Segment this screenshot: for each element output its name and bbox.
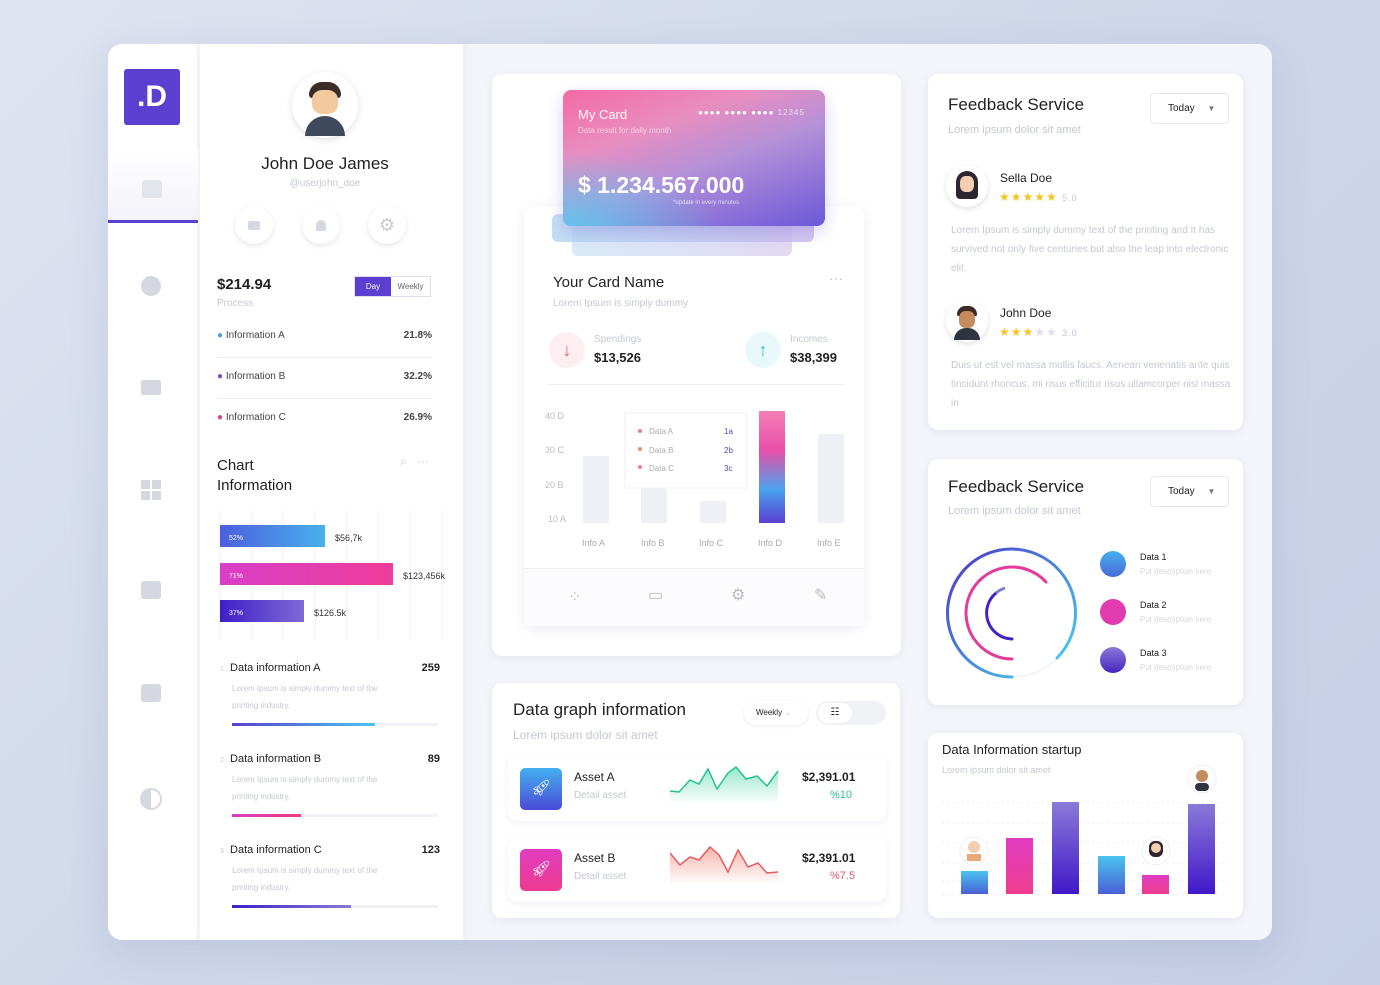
bottom icons: ▭ bbox=[648, 587, 663, 604]
column chart: 40 D bbox=[545, 411, 565, 421]
bar chart bbox=[220, 510, 446, 641]
inner card bbox=[524, 206, 864, 626]
panel: feedback service 1: John Doe bbox=[1000, 306, 1051, 320]
panel: feedback service 1: Today ▼ bbox=[1168, 103, 1215, 114]
column chart: 2b bbox=[724, 446, 733, 455]
asset B: $2,391.01 bbox=[802, 851, 855, 865]
data info list bbox=[220, 662, 440, 908]
panel: data information startup bbox=[928, 733, 1243, 918]
data info list: Lorem Ipsum is simply dummy text of the bbox=[232, 684, 377, 693]
profile icons bbox=[234, 215, 407, 247]
data info list: Lorem Ipsum is simply dummy text of the bbox=[232, 866, 377, 875]
column chart: 3c bbox=[724, 464, 732, 473]
inner card: $13,526 bbox=[594, 350, 641, 365]
panel: feedback service 2 bbox=[928, 459, 1243, 705]
panel: my card: ●●●● ●●●● ●●●● 12345 bbox=[698, 108, 805, 117]
bar chart: $126.5k bbox=[314, 608, 347, 618]
toggle day/weekly: Day bbox=[366, 282, 380, 291]
panel: my card: Data result for daily month bbox=[578, 126, 671, 135]
bottom icons: ⁘ bbox=[568, 589, 581, 606]
nav icons bbox=[140, 276, 162, 810]
data info list: 2 Data information B bbox=[220, 753, 321, 765]
data info list: 89 bbox=[428, 753, 440, 765]
panel: feedback service 1: Duis ut est vel massa mollis faucs. Aenean venenatis ante quis tincidunt rhoncus, mi risus efficitur risus ullamcorper nisl massa in bbox=[951, 360, 1230, 409]
column chart bbox=[545, 411, 844, 546]
bottom icons bbox=[524, 568, 864, 626]
bar chart: $56,7k bbox=[335, 533, 363, 543]
sidebar bbox=[108, 44, 198, 940]
data info list: 123 bbox=[422, 844, 440, 856]
legend bbox=[1100, 551, 1211, 673]
column chart: 30 C bbox=[545, 445, 565, 455]
info list: 26.9% bbox=[404, 412, 432, 423]
panel: feedback service 2: Feedback Service bbox=[948, 477, 1084, 496]
asset A: %10 bbox=[830, 789, 852, 801]
legend: Data 3 bbox=[1140, 648, 1167, 658]
inner card: Lorem Ipsum is simply dummy bbox=[553, 298, 688, 309]
column chart: 20 B bbox=[545, 480, 564, 490]
panel: feedback service 1: ★★★★★ 5.0 bbox=[999, 190, 1078, 204]
toggle day/weekly: Weekly bbox=[397, 282, 424, 291]
profile panel: Process bbox=[217, 298, 253, 309]
panel: feedback service 1: Sella Doe bbox=[1000, 171, 1052, 185]
data info list: 3 Data information C bbox=[220, 844, 322, 856]
asset A: Asset A bbox=[574, 770, 615, 784]
asset B: Asset B bbox=[574, 851, 615, 865]
info list: 21.8% bbox=[404, 330, 432, 341]
panel: feedback service 1: ★★★★★ 3.0 bbox=[999, 325, 1078, 339]
asset A bbox=[508, 756, 886, 821]
panel: data graph information: Data graph information bbox=[513, 700, 686, 719]
data info list: printing industry. bbox=[232, 792, 290, 801]
reviewer: Sella bbox=[946, 165, 988, 207]
bottom icons: ✎ bbox=[814, 587, 827, 604]
panel: my card: My Card bbox=[578, 107, 627, 122]
inner card: Your Card Name bbox=[553, 274, 664, 291]
incomes: ↑ bbox=[758, 340, 768, 360]
inner card: Incomes bbox=[790, 334, 828, 345]
column chart: 10 A bbox=[548, 514, 566, 524]
profile icons: ⚙ bbox=[379, 215, 395, 235]
chart heading bbox=[217, 457, 292, 494]
panel: data graph information: Lorem ipsum dolor sit amet bbox=[513, 728, 658, 742]
data info list: 259 bbox=[422, 662, 440, 674]
legend: Put description here bbox=[1140, 567, 1211, 576]
inner card: Spendings bbox=[594, 334, 641, 345]
legend: Put description here bbox=[1140, 615, 1211, 624]
data info list: printing industry. bbox=[232, 701, 290, 710]
incomes bbox=[745, 332, 781, 368]
avatar bbox=[292, 72, 358, 138]
legend: Data 1 bbox=[1140, 552, 1167, 562]
data info list: Lorem Ipsum is simply dummy text of the bbox=[232, 775, 377, 784]
panel: data graph information: Weekly ⌄ bbox=[756, 708, 791, 717]
name: John Doe James bbox=[261, 154, 389, 173]
profile panel: ⌕ ··· bbox=[400, 454, 429, 468]
toggle day/weekly bbox=[354, 276, 431, 297]
panel: feedback service 1: Lorem Ipsum is simply dummy text of the printing and It has survived not only five centuries but also the leap into electronic elit. bbox=[951, 225, 1228, 274]
panel: my card: *update in every minutes bbox=[673, 200, 739, 206]
spendings bbox=[549, 332, 585, 368]
logo bbox=[124, 69, 180, 125]
inner card: ··· bbox=[829, 270, 843, 286]
asset B: 🚀︎ bbox=[531, 861, 551, 878]
column chart: Data B bbox=[649, 446, 673, 455]
column chart: Data C bbox=[649, 464, 674, 473]
column chart: 1a bbox=[724, 427, 733, 436]
nav: home active bbox=[108, 150, 198, 223]
panel: data information startup: Data Information startup bbox=[942, 742, 1081, 757]
panel: data graph information bbox=[492, 683, 900, 918]
profile panel bbox=[200, 44, 463, 940]
asset B: %7.5 bbox=[830, 870, 855, 882]
column chart: Data A bbox=[649, 427, 674, 436]
asset B: Detail asset bbox=[574, 871, 626, 882]
inner card: $38,399 bbox=[790, 350, 837, 365]
bar chart: 37% bbox=[229, 610, 243, 617]
reviewer: John bbox=[946, 300, 988, 342]
info list: ● Information C bbox=[217, 412, 286, 423]
bar chart: 71% bbox=[229, 573, 243, 580]
spendings: ↓ bbox=[562, 340, 572, 360]
panel: my card bbox=[492, 74, 901, 656]
asset A: 🚀︎ bbox=[531, 780, 551, 797]
panel: my card: $ 1.234.567.000 bbox=[578, 172, 744, 198]
panel: feedback service 1: Feedback Service bbox=[948, 95, 1084, 114]
panel: feedback service 2: Today ▼ bbox=[1168, 486, 1215, 497]
chart heading: Chart bbox=[217, 457, 254, 474]
asset B bbox=[508, 837, 886, 902]
radial chart bbox=[946, 548, 1077, 678]
logo: .D bbox=[137, 80, 167, 113]
bar chart: $123,456k bbox=[403, 571, 446, 581]
balance: $214.94 bbox=[217, 276, 271, 293]
info list: ● Information A bbox=[217, 330, 285, 341]
panel: feedback service 2: Lorem ipsum dolor sit amet bbox=[948, 505, 1081, 517]
bottom icons: ⚙ bbox=[731, 587, 745, 604]
bar chart: 52% bbox=[229, 535, 243, 542]
panel: feedback service 1: Lorem ipsum dolor sit amet bbox=[948, 124, 1081, 136]
chart heading: Information bbox=[217, 477, 292, 494]
info list: ● Information B bbox=[217, 371, 285, 382]
data info list: printing industry. bbox=[232, 883, 290, 892]
panel: data information startup: Lorem ipsum dolor sit amet bbox=[942, 765, 1051, 775]
legend: Put description here bbox=[1140, 663, 1211, 672]
data info list: 1 Data information A bbox=[220, 662, 321, 674]
profile panel: @userjohn_doe bbox=[290, 178, 360, 189]
main frame bbox=[108, 44, 1272, 940]
asset A: Detail asset bbox=[574, 790, 626, 801]
panel: feedback service 1 bbox=[928, 74, 1243, 430]
panel: data graph information: ☷ bbox=[831, 707, 839, 718]
info list bbox=[217, 330, 432, 423]
asset A: $2,391.01 bbox=[802, 770, 855, 784]
credit card stack bbox=[572, 224, 792, 256]
legend: Data 2 bbox=[1140, 600, 1167, 610]
info list: 32.2% bbox=[404, 371, 432, 382]
